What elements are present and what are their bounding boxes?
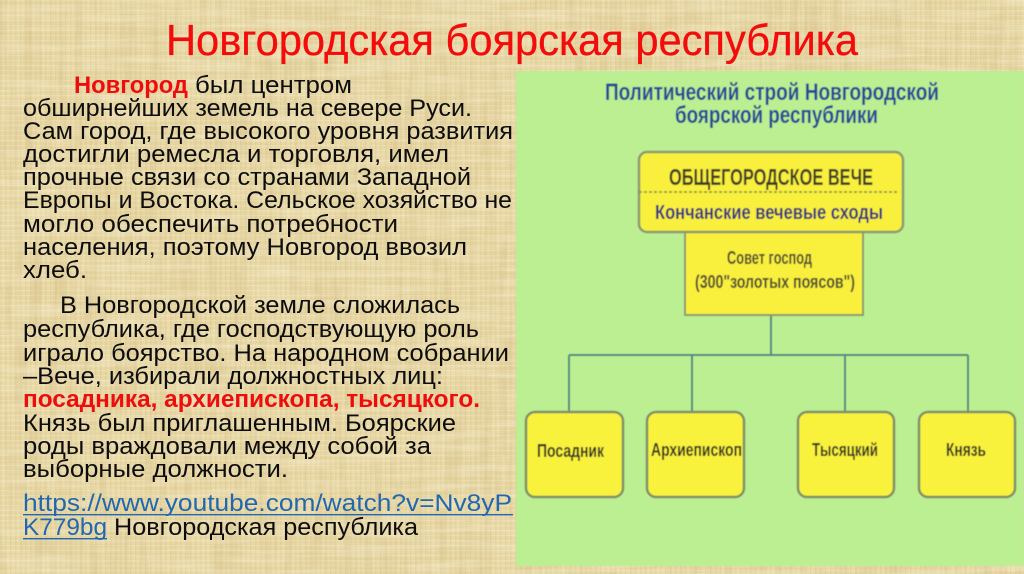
text block: boyar republic: посадника, архиепископа, тысяцкого. bbox=[23, 386, 480, 413]
box: council of lords bbox=[685, 230, 863, 315]
text block: Novgorod overview: Сам город, где высокого уровня развития bbox=[23, 118, 513, 145]
diagram heading: боярской республики bbox=[675, 102, 878, 129]
connector lines bbox=[569, 315, 968, 412]
text block: Novgorod overview: обширнейших земель на севере Руси. bbox=[23, 95, 472, 122]
link and caption: https://www.youtube.com/watch?v=Nv8yP bbox=[23, 490, 512, 517]
text block: Novgorod overview: достигли ремесла и торговля, имел bbox=[23, 141, 449, 168]
panel: political system diagram bbox=[516, 71, 1024, 566]
box: archbishop: Архиепископ bbox=[651, 440, 742, 460]
text block: boyar republic: играло боярство. На народном собрании bbox=[23, 340, 509, 367]
text block: Novgorod overview: населения, поэтому Новгород ввозил bbox=[23, 234, 467, 261]
title: Новгородская боярская республика bbox=[166, 16, 858, 65]
link and caption bbox=[23, 490, 513, 541]
link and caption: Новгородская республика bbox=[114, 514, 419, 541]
box: city veche: Кончанские вечевые сходы bbox=[655, 202, 883, 224]
box: posadnik bbox=[526, 412, 623, 497]
box: posadnik: Посадник bbox=[537, 441, 605, 461]
box: council of lords: (300"золотых поясов") bbox=[695, 272, 855, 292]
text block: boyar republic bbox=[23, 292, 509, 483]
box: city veche: ОБЩЕГОРОДСКОЕ ВЕЧЕ bbox=[669, 164, 873, 190]
text block: boyar republic: Князь был приглашенным. Боярские bbox=[23, 410, 456, 437]
text block: Novgorod overview: был центром bbox=[195, 72, 352, 99]
link and caption: K779bg bbox=[23, 514, 107, 541]
text block: boyar republic: республика, где господствующую роль bbox=[23, 316, 479, 343]
text block: Novgorod overview: прочные связи со странами Западной bbox=[23, 164, 471, 191]
box: archbishop bbox=[647, 412, 744, 497]
box: prince bbox=[919, 412, 1015, 497]
text block: Novgorod overview: Новгород bbox=[74, 72, 188, 99]
box: thousand-man: Тысяцкий bbox=[812, 440, 878, 460]
text block: Novgorod overview: могло обеспечить потребности bbox=[23, 211, 398, 238]
box: council of lords: Совет господ bbox=[727, 248, 812, 268]
text block: boyar republic: выборные должности. bbox=[23, 456, 288, 483]
box: prince: Князь bbox=[946, 440, 986, 460]
text block: boyar republic: роды враждовали между собой за bbox=[23, 433, 432, 460]
text block: boyar republic: В Новгородской земле сложилась bbox=[60, 292, 460, 319]
diagram heading: Политический строй Новгородской bbox=[605, 79, 939, 106]
panel background bbox=[516, 71, 1024, 566]
box: city veche bbox=[639, 152, 903, 232]
box: thousand-man bbox=[798, 412, 894, 497]
text block: boyar republic: –Вече, избирали должностных лиц: bbox=[23, 363, 443, 390]
text block: Novgorod overview: хлеб. bbox=[23, 257, 87, 284]
text block: Novgorod overview: Европы и Востока. Сельское хозяйство не bbox=[23, 187, 512, 214]
text block: Novgorod overview bbox=[23, 72, 513, 284]
diagram heading bbox=[605, 79, 939, 129]
